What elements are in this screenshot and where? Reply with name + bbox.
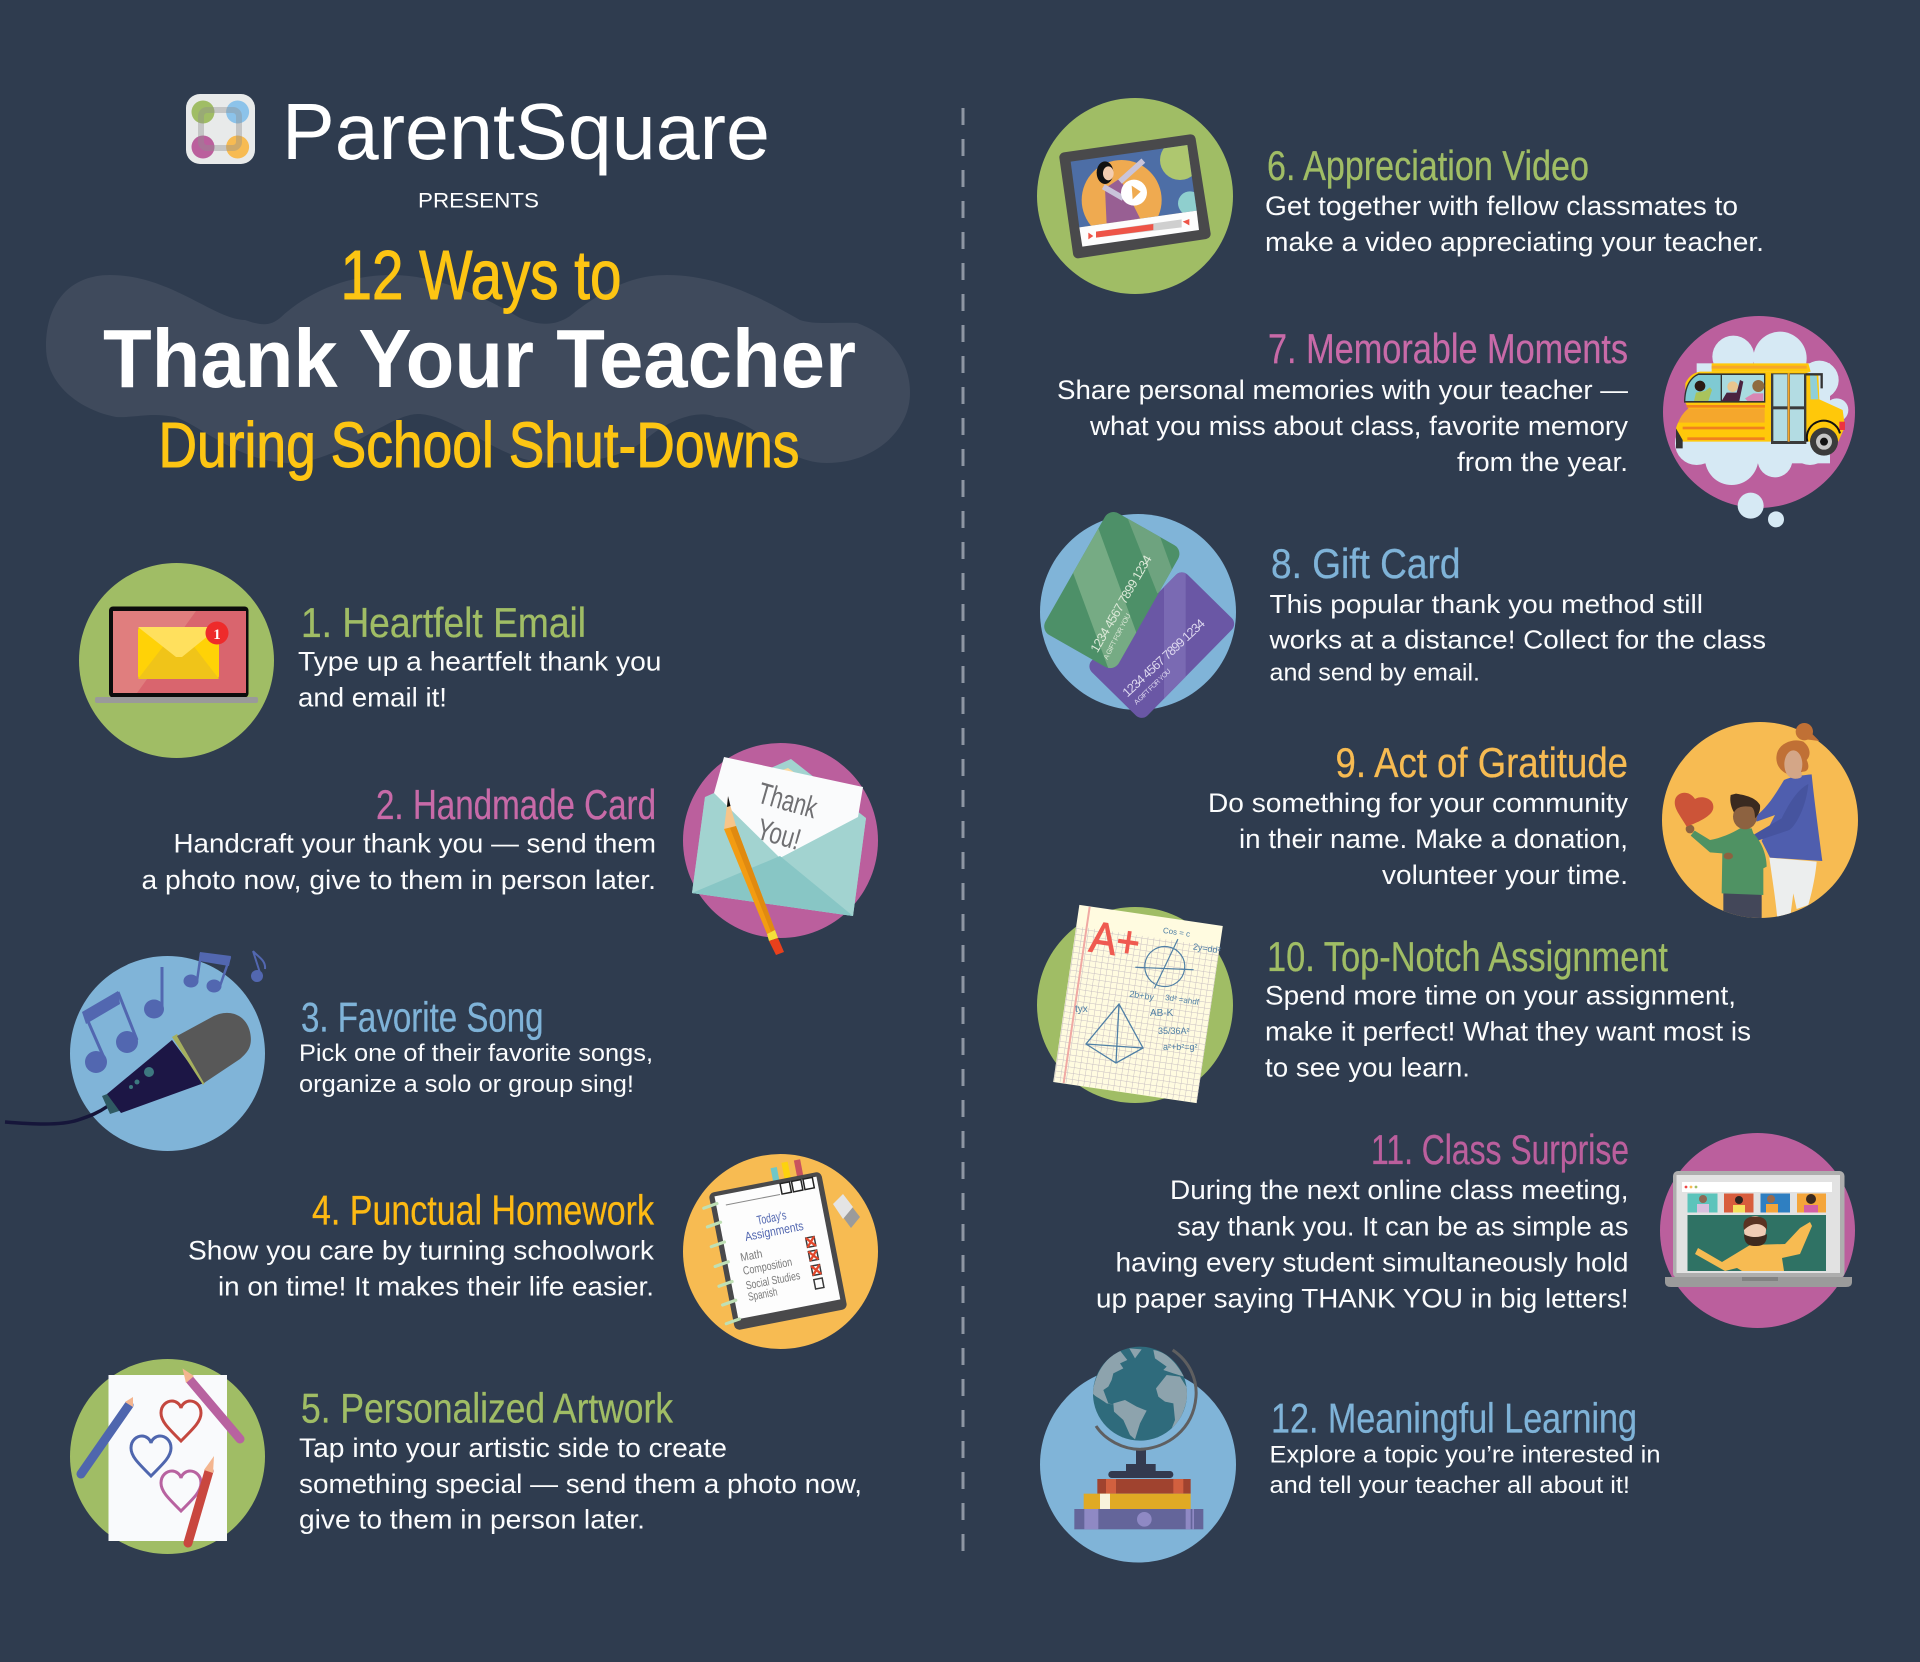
description: from the year. — [1457, 447, 1628, 477]
description: make a video appreciating your teacher. — [1265, 227, 1764, 257]
description — [299, 1040, 653, 1098]
description: Do something for your community — [1208, 788, 1629, 818]
description — [1208, 788, 1629, 890]
description — [1268, 589, 1766, 686]
heading: 9. Act of Gratitude — [1336, 739, 1628, 786]
icon: graded math paper: 3d² =ahdf — [1165, 993, 1200, 1007]
description: and tell your teacher all about it! — [1270, 1472, 1630, 1499]
description — [299, 1433, 862, 1534]
title line 2: Thank Your Teacher — [103, 312, 856, 405]
description: This popular thank you method still — [1270, 589, 1703, 619]
description: Share personal memories with your teacher — — [1057, 375, 1629, 405]
center dashed divider — [962, 108, 964, 1552]
icon: envelope with thank you card and pencil — [683, 743, 878, 955]
description: Get together with fellow classmates to — [1265, 191, 1738, 221]
panel: 6 appreciation video — [1037, 98, 1764, 294]
description: something special — send them a photo now, — [299, 1469, 862, 1499]
description: a photo now, give to them in person later. — [142, 865, 656, 895]
panel: 1 heartfelt email — [79, 563, 662, 758]
panel: 12 meaningful learning — [1040, 1347, 1660, 1562]
description: make it perfect! What they want most is — [1265, 1016, 1751, 1046]
icon: school bus in thought cloud — [1663, 316, 1855, 527]
description: Show you care by turning schoolwork — [188, 1236, 655, 1266]
panel: 5 personalized artwork — [70, 1359, 862, 1554]
icon: microphone with music notes — [5, 951, 265, 1151]
description: Tap into your artistic side to create — [299, 1433, 727, 1463]
icon: laptop with online class — [1660, 1133, 1855, 1328]
icon: gift cards — [1040, 512, 1236, 718]
description: in their name. Make a donation, — [1239, 824, 1628, 854]
description — [1270, 1442, 1660, 1499]
icon: notebook with assignments: Social Studies — [745, 1269, 801, 1292]
panel: 10 top-notch assignment — [1037, 905, 1751, 1103]
title background blob — [46, 275, 910, 463]
icon: gift cards: 1234 4567 7899 1234 — [1120, 616, 1208, 700]
title — [103, 236, 856, 481]
description: works at a distance! Collect for the class — [1268, 624, 1766, 654]
description: and email it! — [298, 682, 447, 712]
panel: 9 act of gratitude — [1208, 722, 1858, 920]
heading: 4. Punctual Homework — [312, 1186, 655, 1234]
description: Explore a topic you’re interested in — [1270, 1442, 1660, 1468]
description: Type up a heartfelt thank you — [298, 646, 662, 676]
icon: tablet with video — [1037, 98, 1233, 294]
icon: notebook with assignments: Spanish — [747, 1285, 779, 1304]
logo wordmark: ParentSquare — [282, 87, 770, 176]
icon: graded math paper: 2b+by — [1129, 989, 1155, 1002]
icon: mother and child with heart — [1662, 722, 1858, 920]
icon: graded math paper: 35/36A² — [1158, 1026, 1190, 1036]
heading: 10. Top-Notch Assignment — [1267, 933, 1668, 980]
icon: graded math paper: a²+b²=g² — [1163, 1042, 1198, 1052]
description: During the next online class meeting, — [1170, 1175, 1628, 1205]
panel: 11 class surprise — [1096, 1126, 1855, 1328]
description: having every student simultaneously hold — [1116, 1248, 1628, 1278]
icon: drawing with hearts and pencils — [70, 1359, 265, 1554]
description: say thank you. It can be as simple as — [1177, 1212, 1628, 1242]
panel: 3 favorite song — [5, 951, 653, 1151]
icon: graded math paper: A+ — [1087, 913, 1143, 968]
title line 1: 12 Ways to — [340, 236, 622, 314]
description: in on time! It makes their life easier. — [218, 1272, 654, 1302]
panel: 2 handmade card — [142, 743, 878, 955]
icon: gift cards: A GIFT FOR YOU — [1103, 613, 1132, 661]
icon: envelope with thank you card and pencil: Thank — [754, 777, 822, 825]
icon: notebook with assignments: Assignments — [744, 1218, 805, 1244]
heading: 7. Memorable Moments — [1268, 325, 1628, 372]
heading: 8. Gift Card — [1271, 540, 1460, 587]
icon: gift cards: A GIFT FOR YOU — [1133, 668, 1173, 706]
icon: notebook with assignments — [683, 1154, 878, 1349]
icon: graded math paper: 2y=dd² — [1192, 941, 1221, 955]
description: Handcraft your thank you — send them — [174, 828, 656, 858]
description: volunteer your time. — [1382, 860, 1628, 890]
icon: globe on books — [1040, 1347, 1236, 1562]
icon: graded math paper: Cos = c — [1162, 926, 1191, 939]
presents label: PRESENTS — [418, 190, 539, 212]
description — [298, 646, 662, 712]
icon: notebook with assignments: Composition — [742, 1256, 793, 1278]
heading: 3. Favorite Song — [301, 994, 544, 1040]
heading: 2. Handmade Card — [376, 781, 656, 828]
panel: 8 gift card — [1040, 500, 1766, 728]
description — [1096, 1175, 1628, 1314]
heading: 11. Class Surprise — [1371, 1126, 1629, 1173]
header — [186, 87, 770, 212]
description — [1057, 375, 1629, 477]
panel: 7 memorable moments — [1057, 316, 1855, 527]
description: what you miss about class, favorite memory — [1089, 411, 1629, 441]
icon: graded math paper — [1037, 905, 1233, 1103]
icon: graded math paper: tyx — [1075, 1004, 1088, 1015]
description: up paper saying THANK YOU in big letters! — [1096, 1284, 1628, 1314]
description: Pick one of their favorite songs, — [299, 1040, 653, 1067]
heading: 5. Personalized Artwork — [301, 1384, 674, 1432]
heading: 1. Heartfelt Email — [301, 599, 586, 646]
description — [1265, 980, 1751, 1082]
description: and send by email. — [1270, 660, 1480, 686]
description: organize a solo or group sing! — [299, 1071, 634, 1098]
icon: laptop with email: 1 — [213, 627, 221, 643]
heading: 12. Meaningful Learning — [1271, 1394, 1637, 1442]
description: give to them in person later. — [299, 1504, 645, 1534]
description: Spend more time on your assignment, — [1265, 980, 1736, 1010]
icon: notebook with assignments: Today's — [755, 1207, 787, 1228]
icon: gift cards: 1234 4567 7899 1234 — [1088, 553, 1155, 655]
icon: graded math paper: AB-K — [1150, 1008, 1174, 1019]
icon: envelope with thank you card and pencil: You! — [753, 813, 804, 857]
heading: 6. Appreciation Video — [1267, 142, 1589, 189]
panel: 4 punctual homework — [188, 1154, 878, 1349]
icon: laptop with email — [79, 563, 274, 758]
icon: ParentSquare logo — [186, 94, 255, 164]
description — [1265, 191, 1764, 257]
icon: notebook with assignments: Math — [739, 1247, 764, 1264]
description — [188, 1236, 655, 1302]
description: to see you learn. — [1265, 1052, 1470, 1082]
title line 3: During School Shut-Downs — [158, 409, 800, 481]
description — [142, 828, 656, 895]
